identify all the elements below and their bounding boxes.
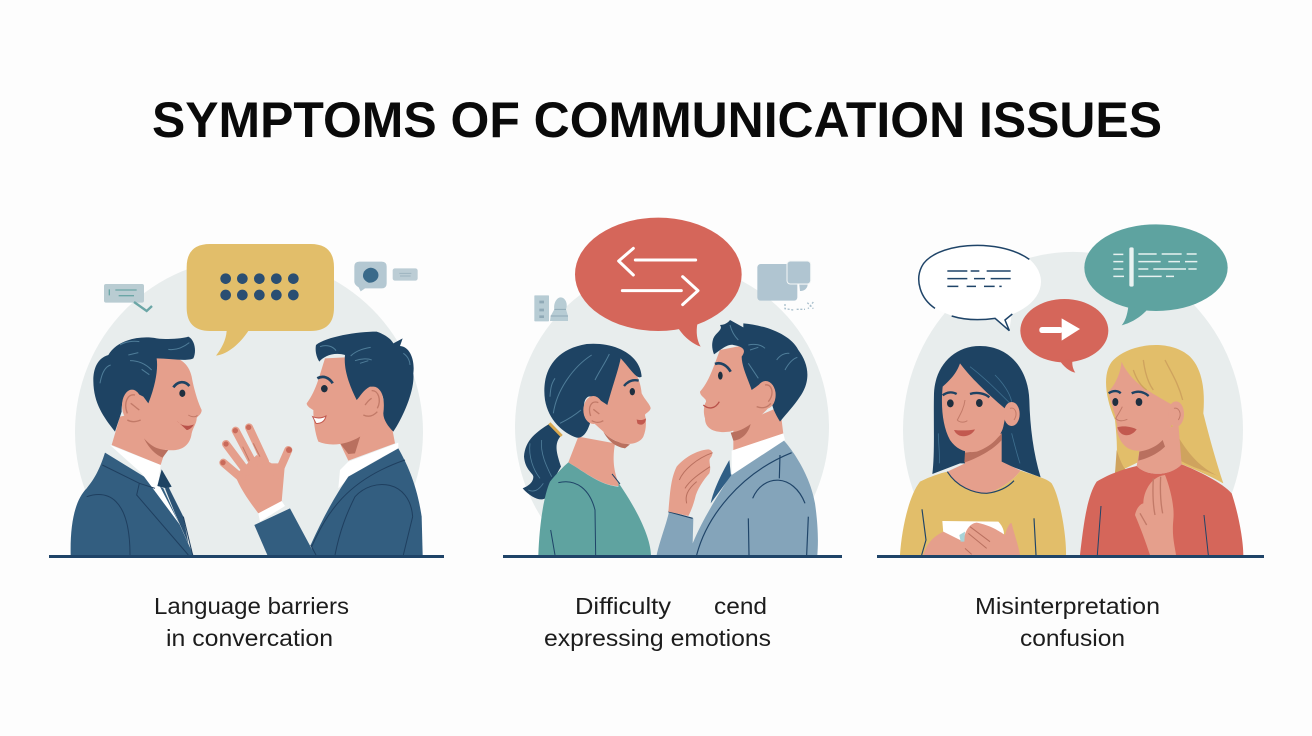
speech bubble: teal with text lines bbox=[1084, 224, 1228, 325]
speech bubble: yellow with dots bbox=[187, 244, 334, 356]
background circle bbox=[903, 252, 1243, 556]
person: man in grey suit bbox=[657, 320, 818, 555]
caption: misinterpretation confusion bbox=[975, 593, 1160, 651]
caption: language barriers: Language barriers bbox=[154, 593, 349, 619]
icon: building and figure bbox=[534, 295, 568, 321]
icon: small chat blob bbox=[354, 262, 418, 291]
person: woman with ponytail bbox=[523, 344, 651, 555]
hand: raised open palm bbox=[220, 425, 292, 513]
person: dark-haired woman bbox=[900, 346, 1066, 555]
background circle bbox=[75, 258, 423, 556]
ground line bbox=[49, 555, 444, 558]
person: blonde woman bbox=[1080, 345, 1243, 555]
caption: language barriers: in convercation bbox=[166, 625, 333, 651]
speech bubble: red with arrow bbox=[1020, 299, 1108, 373]
caption: misinterpretation confusion: confusion bbox=[1020, 625, 1125, 651]
panel: language barriers bbox=[49, 244, 444, 651]
caption: language barriers bbox=[154, 593, 349, 651]
icon: small message with check bbox=[104, 284, 152, 311]
ground line bbox=[503, 555, 842, 558]
caption: difficulty expressing emotions: cend bbox=[714, 593, 767, 619]
person: right man bbox=[220, 332, 423, 555]
background circle bbox=[515, 264, 829, 556]
caption: difficulty expressing emotions bbox=[544, 593, 771, 651]
person: left man bbox=[71, 337, 202, 555]
panel: difficulty expressing emotions bbox=[503, 218, 842, 651]
panel: misinterpretation confusion bbox=[877, 224, 1264, 651]
ground line bbox=[877, 555, 1264, 558]
speech bubble: red with arrows bbox=[575, 218, 742, 347]
icon: overlapping chat squares bbox=[757, 261, 813, 310]
title: SYMPTOMS OF COMMUNICATION ISSUES bbox=[152, 92, 1162, 148]
caption: difficulty expressing emotions: expressing emotions bbox=[544, 625, 771, 651]
caption: difficulty expressing emotions: Difficulty bbox=[575, 593, 672, 619]
caption: misinterpretation confusion: Misinterpretation bbox=[975, 593, 1160, 619]
speech bubble: white outlined bbox=[919, 243, 1041, 331]
